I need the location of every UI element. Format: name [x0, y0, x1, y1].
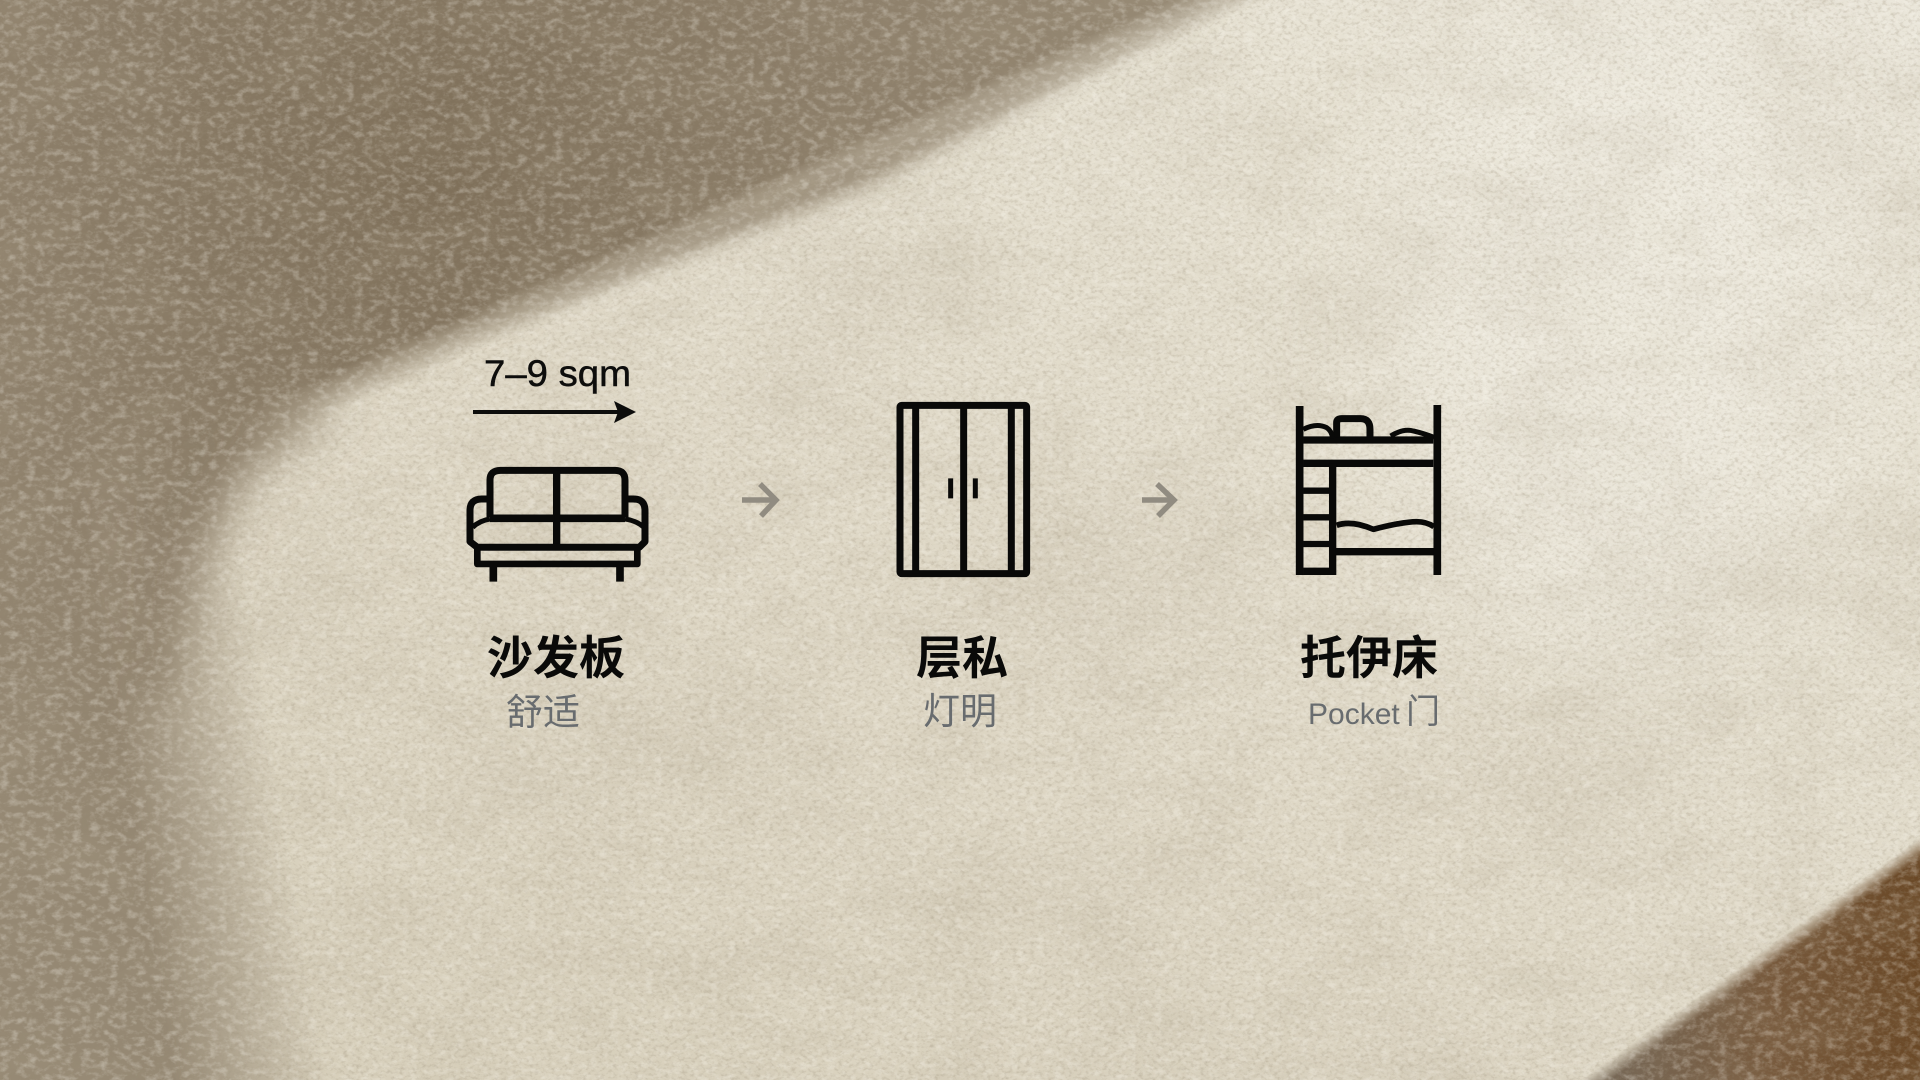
label: privacy: 层私 — [916, 622, 1008, 688]
label: sofa board: 沙发板 — [487, 622, 625, 688]
sub-label: pocket door: 门 — [1406, 684, 1440, 733]
icon: sofa — [470, 470, 645, 582]
arrow: sofa to wardrobe — [742, 484, 776, 516]
icon: bunk bed — [1300, 405, 1437, 575]
arrow: wardrobe to bunk bed — [1142, 484, 1174, 516]
dimension label: 7–9 sqm: 7–9 sqm — [484, 353, 631, 394]
sub-label: pocket door: Pocket — [1308, 698, 1400, 731]
icon: wardrobe — [900, 405, 1027, 574]
sub-label: pocket door — [1308, 684, 1440, 733]
sub-label: comfort: 舒适 — [506, 682, 580, 736]
label: Murphy bed: 托伊床 — [1300, 622, 1438, 688]
dimension arrow — [473, 401, 636, 423]
sub-label: lighting: 灯明 — [923, 681, 997, 735]
